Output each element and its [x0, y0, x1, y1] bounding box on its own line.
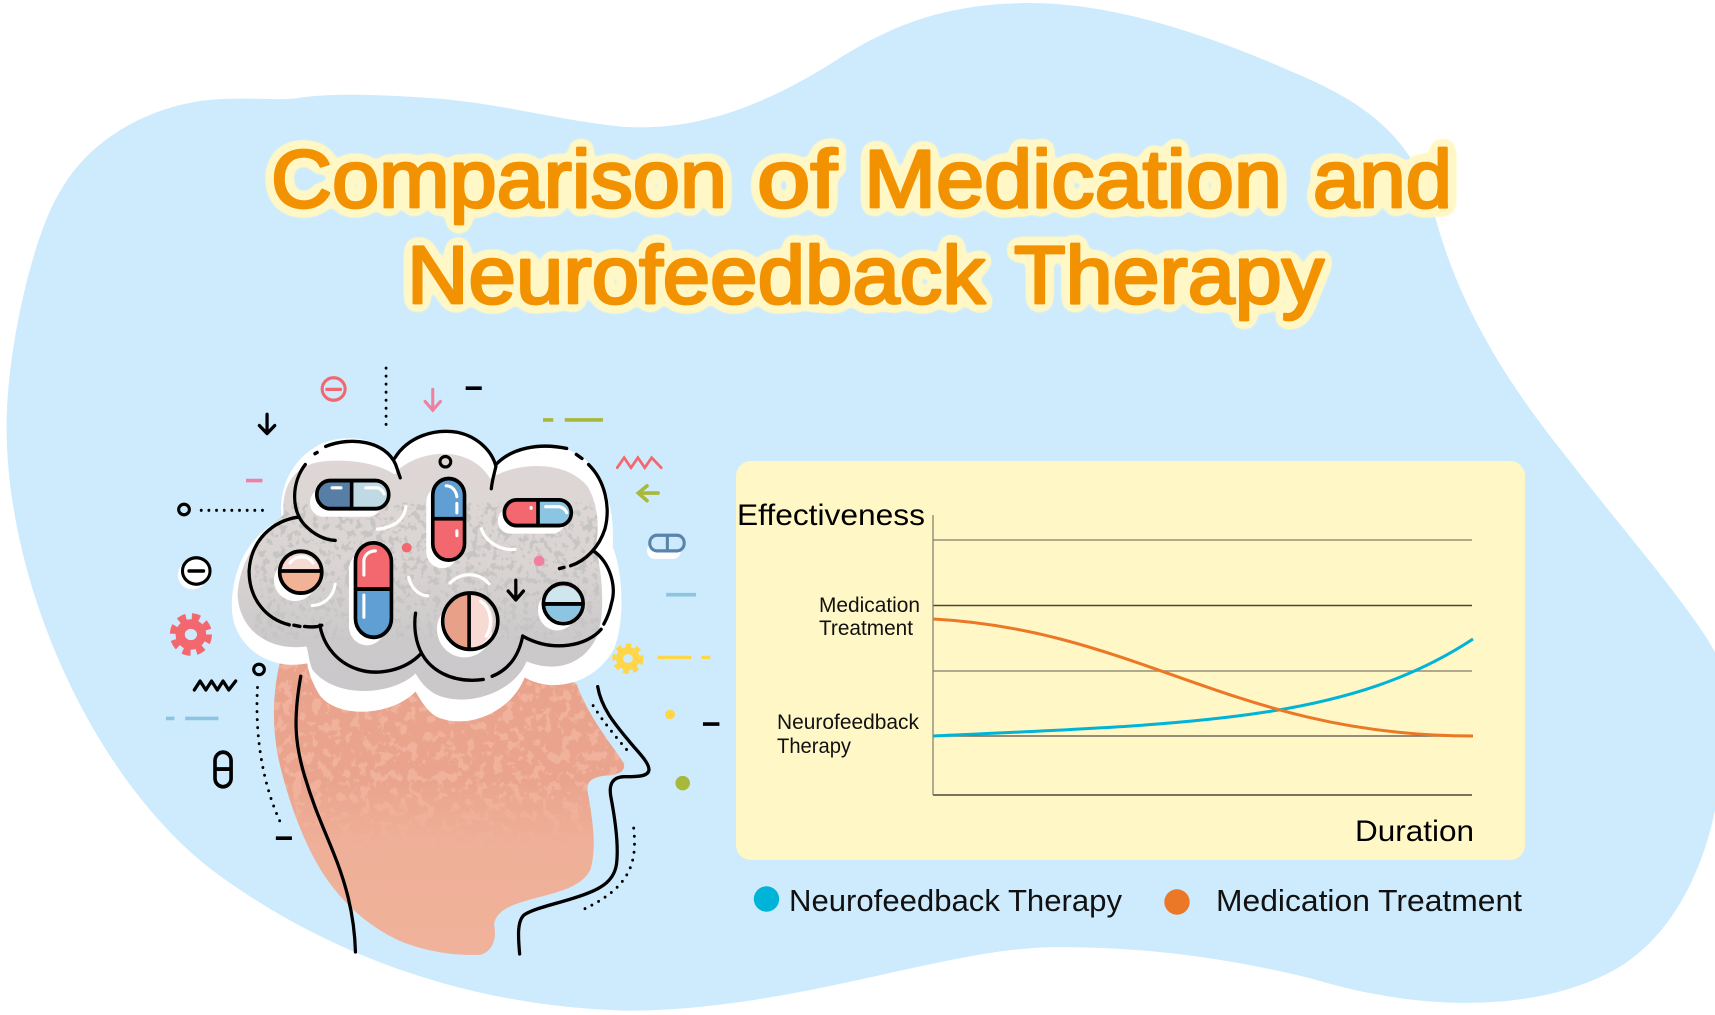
legend marker: neurofeedback — [754, 886, 779, 912]
yellow dot — [665, 710, 675, 719]
title: of — [757, 134, 837, 225]
y axis — [932, 515, 934, 795]
icon: pink arrow — [425, 389, 440, 410]
icon: blue pill — [647, 535, 684, 559]
label: medication treatment: Medication — [819, 594, 920, 617]
dotted vertical — [382, 368, 390, 432]
pill: blue red vertical — [426, 479, 465, 568]
title: Therapy — [1014, 230, 1324, 321]
pill: blue grey horizontal — [310, 481, 389, 517]
tablet: split — [437, 593, 498, 657]
black dash — [703, 720, 719, 729]
icon: red gear — [173, 616, 209, 653]
label: neurofeedback therapy: Therapy — [777, 735, 851, 758]
pill: red blue horizontal — [498, 500, 571, 534]
title: Medication — [864, 134, 1282, 225]
neurofeedback curve — [933, 639, 1473, 736]
cloud white halo — [232, 431, 622, 721]
title — [271, 134, 1452, 321]
icon: black minus circle — [178, 558, 210, 589]
green dashes — [543, 415, 603, 424]
grid lines — [933, 540, 1472, 795]
legend text: neurofeedback: Neurofeedback Therapy — [789, 883, 1122, 918]
title: Comparison — [271, 134, 727, 225]
black dash — [276, 834, 292, 843]
legend — [754, 883, 1522, 918]
medication curve — [933, 619, 1473, 736]
x axis title: Duration — [1355, 815, 1474, 848]
label: neurofeedback therapy — [777, 711, 919, 758]
ring with dotted line — [179, 504, 266, 515]
panel: chart — [736, 461, 1525, 860]
blue dashes — [166, 714, 218, 723]
tablet: blue — [538, 583, 583, 630]
icon: black down arrow — [259, 414, 275, 434]
icon: red zigzag — [617, 458, 661, 468]
green dot — [675, 776, 690, 790]
title: and — [1313, 134, 1452, 225]
label: medication treatment: Treatment — [819, 617, 913, 640]
ring with dotted curve — [254, 664, 281, 823]
floating icons — [166, 368, 719, 911]
black dash — [466, 384, 482, 393]
cloud grey fill — [238, 454, 602, 700]
dotted chin line — [579, 828, 635, 911]
blue dash — [666, 590, 696, 599]
cloud white highlights — [312, 507, 515, 606]
icon: red minus circle — [322, 378, 345, 400]
pill: red blue vertical — [349, 543, 391, 645]
pink dash — [246, 476, 262, 485]
icon: green arrow — [638, 486, 658, 501]
cloud outline — [249, 431, 613, 680]
face profile line — [519, 687, 649, 954]
icon: yellow gear — [614, 645, 642, 672]
tablet: peach — [274, 550, 322, 601]
label: neurofeedback therapy: Neurofeedback — [777, 711, 919, 734]
legend marker: medication — [1164, 889, 1190, 915]
legend text: medication: Medication Treatment — [1216, 883, 1522, 918]
dotted nose line — [593, 706, 631, 754]
illustration: head with pills in brain cloud — [166, 368, 719, 957]
icon: black zigzag — [194, 681, 236, 690]
y axis title: Effectiveness — [737, 499, 925, 532]
yellow dashes — [657, 653, 710, 661]
label: medication treatment — [819, 594, 920, 640]
icon: small black pill — [215, 752, 231, 787]
line chart — [737, 499, 1474, 848]
head silhouette — [270, 663, 634, 957]
title: Neurofeedback — [407, 230, 986, 321]
inner accents — [402, 456, 545, 600]
back of neck line — [296, 676, 355, 952]
